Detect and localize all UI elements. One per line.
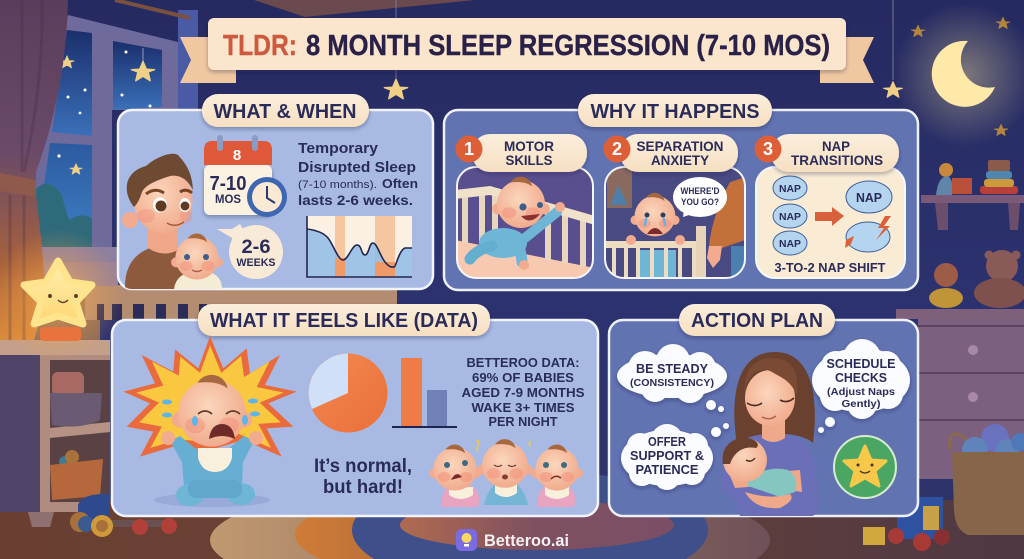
callout: 2-6 weeks (217, 224, 283, 279)
wall stars (911, 17, 1010, 136)
thought bubble: schedule checks (812, 339, 910, 433)
text: it's normal but hard (314, 456, 412, 498)
heading: why it happens: WHY IT HAPPENS (590, 101, 760, 123)
callout: 2-6 weeks: WEEKS (236, 257, 276, 269)
nap clouds: three naps: NAP (779, 238, 801, 250)
nap clouds: three naps: NAP (779, 183, 801, 195)
icon: calendar: 7-10 (210, 173, 246, 195)
chart: pie 69 percent (308, 354, 388, 432)
illustration: three tired babies (429, 439, 583, 507)
nap clouds: three naps (773, 176, 807, 255)
label: motor skills: MOTOR (504, 138, 554, 154)
label: separation anxiety: 2 (612, 139, 622, 159)
thought bubble: offer support and patience: SUPPORT & (630, 449, 704, 463)
heading: what and when (202, 94, 369, 127)
panel: action plan (609, 304, 918, 516)
icon: calendar (204, 135, 272, 215)
thought bubble: be steady: (CONSISTENCY) (630, 377, 714, 389)
chart: bars (392, 358, 457, 428)
text: betteroo data: WAKE 3+ TIMES (472, 400, 575, 415)
card: separation anxiety illustration (605, 167, 746, 280)
card: nap transitions (756, 167, 905, 278)
heading: action plan (679, 304, 835, 336)
thought bubble: offer support and patience: OFFER (648, 435, 686, 449)
hanging star right (884, 0, 902, 97)
hanging star middle (384, 0, 408, 99)
text: what and when description: (7-10 months). (298, 179, 377, 191)
text: what and when description (298, 140, 418, 208)
illustration: father and baby (122, 154, 223, 289)
heading: action plan: ACTION PLAN (691, 310, 823, 332)
thought bubble: schedule checks: Gently) (842, 399, 880, 410)
icon: calendar: MOS (215, 192, 241, 206)
text: betteroo data: PER NIGHT (488, 414, 558, 429)
card: motor skills illustration (455, 167, 595, 280)
window with night sky (35, 15, 178, 286)
icon: clock (247, 177, 287, 217)
speech bubble: where'd you go: WHERE'D (680, 186, 720, 196)
icon: calendar: 8 (233, 147, 241, 164)
heading: what it feels like (198, 304, 490, 336)
text: betteroo data (462, 355, 585, 429)
text: betteroo data: BETTEROO DATA: (466, 355, 580, 370)
speech bubble: where'd you go: YOU GO? (681, 197, 719, 207)
illustration: mother holding sleeping baby (722, 352, 818, 516)
nap clouds: three naps: NAP (779, 211, 801, 223)
label: nap transitions: NAP (822, 138, 850, 154)
star lamp (0, 229, 124, 361)
text: what and when description: Often (382, 176, 418, 191)
logo: betteroo.ai: Betteroo.ai (484, 531, 569, 550)
title banner: 8 MONTH SLEEP REGRESSION (7-10 MOS) (306, 30, 830, 62)
thought bubble: be steady (617, 344, 727, 412)
panel: what and when (118, 94, 433, 289)
chart: sleep disruption curve (307, 216, 412, 277)
teddy bears (929, 250, 1024, 308)
nap clouds: two naps: NAP (856, 190, 882, 205)
illustration: crying baby in burst (123, 336, 297, 507)
badge: star (834, 436, 896, 498)
speech bubble: where'd you go (673, 177, 727, 217)
panel: what it feels like (112, 304, 598, 516)
panel: why it happens (444, 94, 918, 290)
text: what and when description: lasts 2-6 weeks. (298, 192, 413, 208)
text: what and when description: Temporary (298, 140, 379, 157)
wall shelf with toys (921, 160, 1024, 230)
heading: what it feels like: WHAT IT FEELS LIKE (DATA) (210, 310, 478, 332)
logo: betteroo.ai (456, 529, 569, 551)
heading: what and when: WHAT & WHEN (214, 101, 356, 123)
wooden blocks and toy truck (863, 497, 950, 551)
text: it's normal but hard: but hard! (323, 477, 403, 498)
moon (932, 41, 995, 107)
callout: 2-6 weeks: 2-6 (242, 237, 270, 258)
curtain (0, 0, 68, 340)
thought bubble: schedule checks: SCHEDULE (826, 357, 896, 371)
basket with toys (950, 424, 1024, 535)
thought bubble: schedule checks: (Adjust Naps (827, 387, 895, 398)
nap clouds: two naps (845, 181, 892, 252)
label: nap transitions: 3 (763, 139, 773, 159)
title banner (180, 18, 874, 83)
label: separation anxiety: SEPARATION (636, 138, 724, 154)
label: motor skills: SKILLS (506, 152, 552, 168)
label: separation anxiety: ANXIETY (651, 152, 710, 168)
thought bubble: offer support and patience (621, 423, 729, 490)
crib behind panels (85, 285, 397, 320)
text: betteroo data: AGED 7-9 MONTHS (462, 385, 585, 400)
thought bubble: be steady: BE STEADY (636, 362, 709, 376)
label: motor skills: 1 (464, 139, 474, 159)
curtain rod and right curtain (115, 0, 198, 110)
heading: why it happens (578, 94, 772, 127)
thought bubble: schedule checks: CHECKS (835, 371, 887, 385)
label: nap transitions: TRANSITIONS (791, 152, 883, 168)
rug (210, 470, 770, 559)
dresser (896, 309, 1024, 479)
thought bubble: offer support and patience: PATIENCE (636, 463, 698, 477)
title banner: TLDR: (223, 30, 297, 62)
card: nap transitions: 3-TO-2 NAP SHIFT (774, 261, 886, 275)
label: separation anxiety (604, 134, 738, 172)
toy car (70, 494, 177, 537)
text: what and when description: Disrupted Sleep (298, 159, 416, 176)
text: it's normal but hard: It’s normal, (314, 456, 412, 477)
label: motor skills (456, 134, 587, 172)
left nightstand (0, 340, 110, 527)
label: nap transitions (754, 134, 899, 172)
arrow (815, 207, 844, 226)
text: betteroo data: 69% OF BABIES (472, 370, 574, 385)
hanging star left (131, 61, 155, 81)
